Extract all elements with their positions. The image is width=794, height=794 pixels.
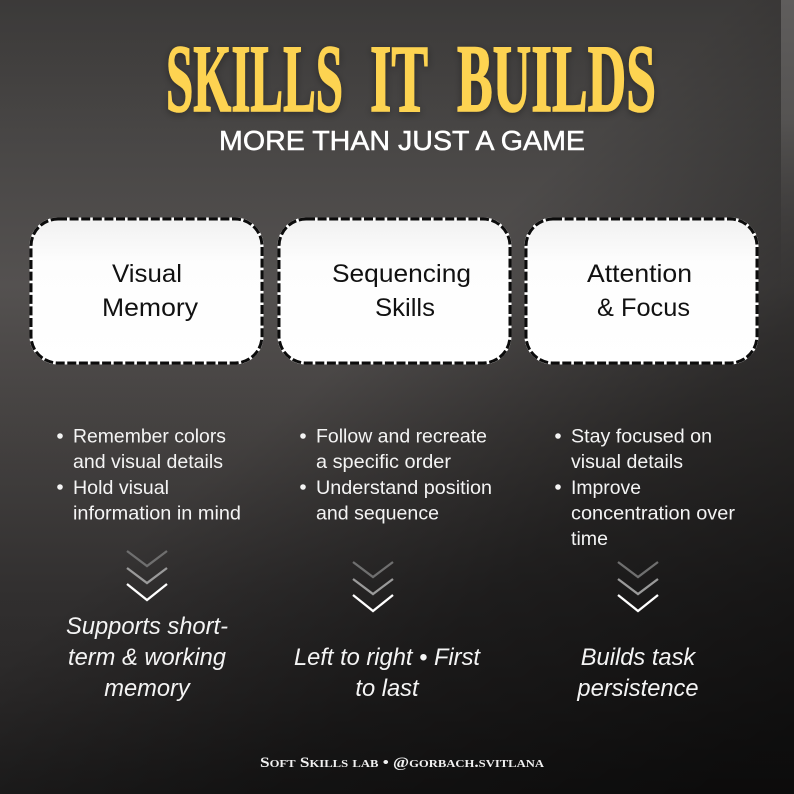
callout: visual memory outcome: term & working bbox=[68, 645, 226, 671]
icon: chevrons down, sequencing skills bbox=[353, 562, 393, 611]
icon: chevrons down, attention and focus bbox=[618, 562, 658, 611]
bullet list: attention and focus: visual details bbox=[571, 451, 683, 473]
bullet list: visual memory: Remember colors bbox=[73, 426, 226, 448]
heading: sequencing skills: Skills bbox=[375, 294, 435, 322]
bullet list: sequencing skills: a specific order bbox=[316, 451, 452, 473]
callout: visual memory outcome: memory bbox=[104, 676, 192, 702]
callout: visual memory outcome: Supports short- bbox=[66, 614, 228, 640]
bullet list: sequencing skills: and sequence bbox=[316, 502, 439, 524]
title: IT bbox=[370, 25, 428, 132]
bullet list: sequencing skills: Follow and recreate bbox=[316, 426, 487, 448]
bullet list: sequencing skills bbox=[300, 426, 492, 524]
heading: sequencing skills: Sequencing bbox=[332, 260, 471, 288]
title: SKILLS bbox=[166, 25, 343, 132]
callout: sequencing outcome: Left to right • First bbox=[294, 645, 481, 671]
callout: attention outcome: Builds task bbox=[581, 645, 696, 671]
bullet list: sequencing skills: Understand position bbox=[316, 477, 492, 499]
footer credit: Soft Skills lab • @gorbach.svitlana bbox=[260, 755, 544, 771]
bullet list: attention and focus: concentration over bbox=[571, 502, 736, 524]
heading: attention and focus: Attention bbox=[587, 260, 692, 288]
bullet list: attention and focus: time bbox=[571, 528, 608, 550]
panel: sequencing skills card bbox=[279, 219, 510, 363]
bullet list: visual memory bbox=[57, 426, 241, 524]
panel: attention and focus card bbox=[526, 219, 757, 363]
bullet list: visual memory: Hold visual bbox=[73, 477, 169, 499]
heading: visual memory: Visual bbox=[112, 260, 182, 288]
heading: attention and focus: & Focus bbox=[597, 294, 690, 322]
bullet list: attention and focus bbox=[555, 426, 736, 550]
callout: attention outcome: persistence bbox=[576, 676, 699, 702]
icon: chevrons down, visual memory bbox=[127, 551, 167, 600]
subtitle: MORE THAN JUST A GAME bbox=[219, 125, 585, 156]
heading: visual memory: Memory bbox=[102, 294, 199, 322]
bullet list: visual memory: and visual details bbox=[73, 451, 223, 473]
bullet list: attention and focus: Stay focused on bbox=[571, 426, 712, 448]
callout: sequencing outcome: to last bbox=[355, 676, 420, 702]
panel: visual memory card bbox=[31, 219, 262, 363]
bullet list: visual memory: information in mind bbox=[73, 502, 241, 524]
bullet list: attention and focus: Improve bbox=[571, 477, 641, 499]
